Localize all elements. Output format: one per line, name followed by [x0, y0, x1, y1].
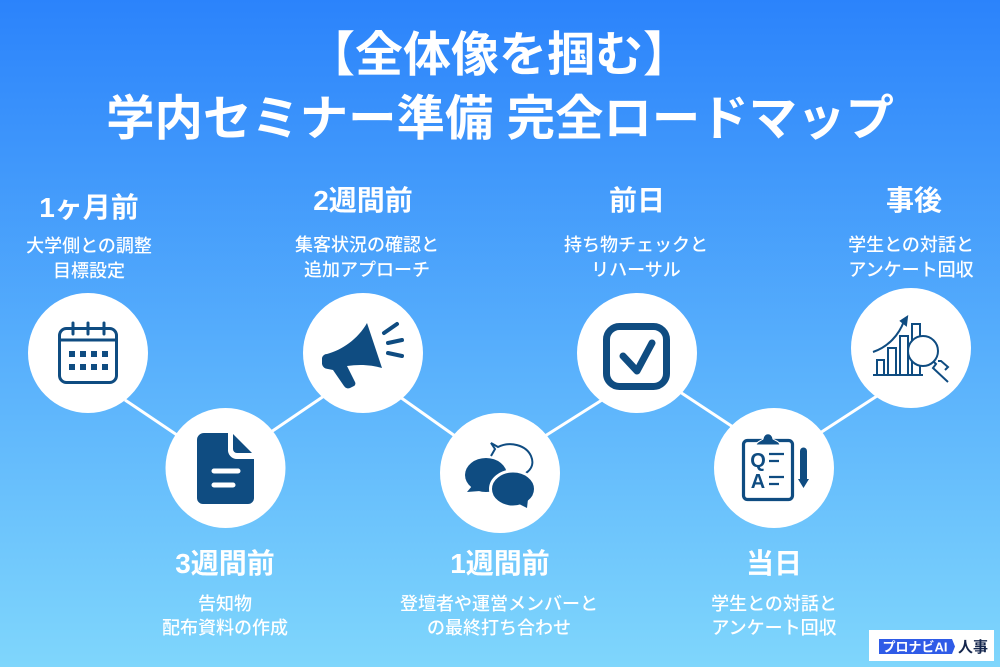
title: 学内セミナー準備 完全ロードマップ [106, 92, 894, 146]
step: 事後 [848, 185, 974, 408]
icon: clipboard Q&A [744, 434, 809, 500]
connector lines [125, 392, 877, 436]
step: 1週間前: 登壇者や運営メンバーと [400, 594, 598, 614]
step: 前日: 持ち物チェックと [564, 235, 708, 255]
step: 当日: アンケート回収 [711, 618, 837, 638]
icon: speech bubbles [465, 443, 536, 508]
step: 2週間前 [295, 185, 439, 413]
logo badge: 人事 [958, 638, 988, 656]
step: 3週間前 [162, 408, 288, 638]
icon: checkbox [606, 326, 666, 386]
step: 事後: アンケート回収 [848, 260, 974, 280]
title: 【全体像を掴む】 [307, 29, 691, 82]
icon: chart with magnifier [873, 317, 948, 382]
step: 1週間前 [400, 413, 598, 638]
icon: calendar [59, 323, 117, 382]
step: 1ヶ月前: 大学側との調整 [26, 236, 152, 256]
logo badge [869, 630, 994, 661]
title [106, 29, 894, 146]
step: 1ヶ月前: 1ヶ月前 [39, 192, 139, 223]
step: 前日: 前日 [609, 185, 665, 216]
icon: clipboard Q&A: Q [750, 450, 766, 472]
step: 3週間前: 告知物 [198, 594, 252, 614]
icon: megaphone [322, 323, 402, 388]
step: 1ヶ月前 [26, 192, 152, 413]
step: 1週間前: の最終打ち合わせ [427, 618, 571, 638]
step: 当日 [711, 408, 837, 638]
step: 1週間前: 1週間前 [450, 548, 550, 579]
step: 3週間前: 配布資料の作成 [162, 618, 288, 638]
step: 2週間前: 追加アプローチ [304, 260, 430, 280]
step: 前日 [564, 185, 708, 413]
step: 事後: 学生との対話と [848, 235, 974, 255]
logo badge: プロナビAI [882, 640, 948, 654]
step: 前日: リハーサル [591, 260, 681, 280]
icon: clipboard Q&A: A [751, 471, 765, 493]
step: 2週間前: 2週間前 [313, 185, 413, 216]
step: 事後: 事後 [886, 185, 942, 216]
step: 2週間前: 集客状況の確認と [295, 235, 439, 255]
icon: document [197, 433, 254, 504]
step: 1ヶ月前: 目標設定 [53, 261, 125, 281]
step: 当日: 当日 [746, 548, 802, 579]
step: 3週間前: 3週間前 [175, 548, 275, 579]
step: 当日: 学生との対話と [711, 594, 837, 614]
